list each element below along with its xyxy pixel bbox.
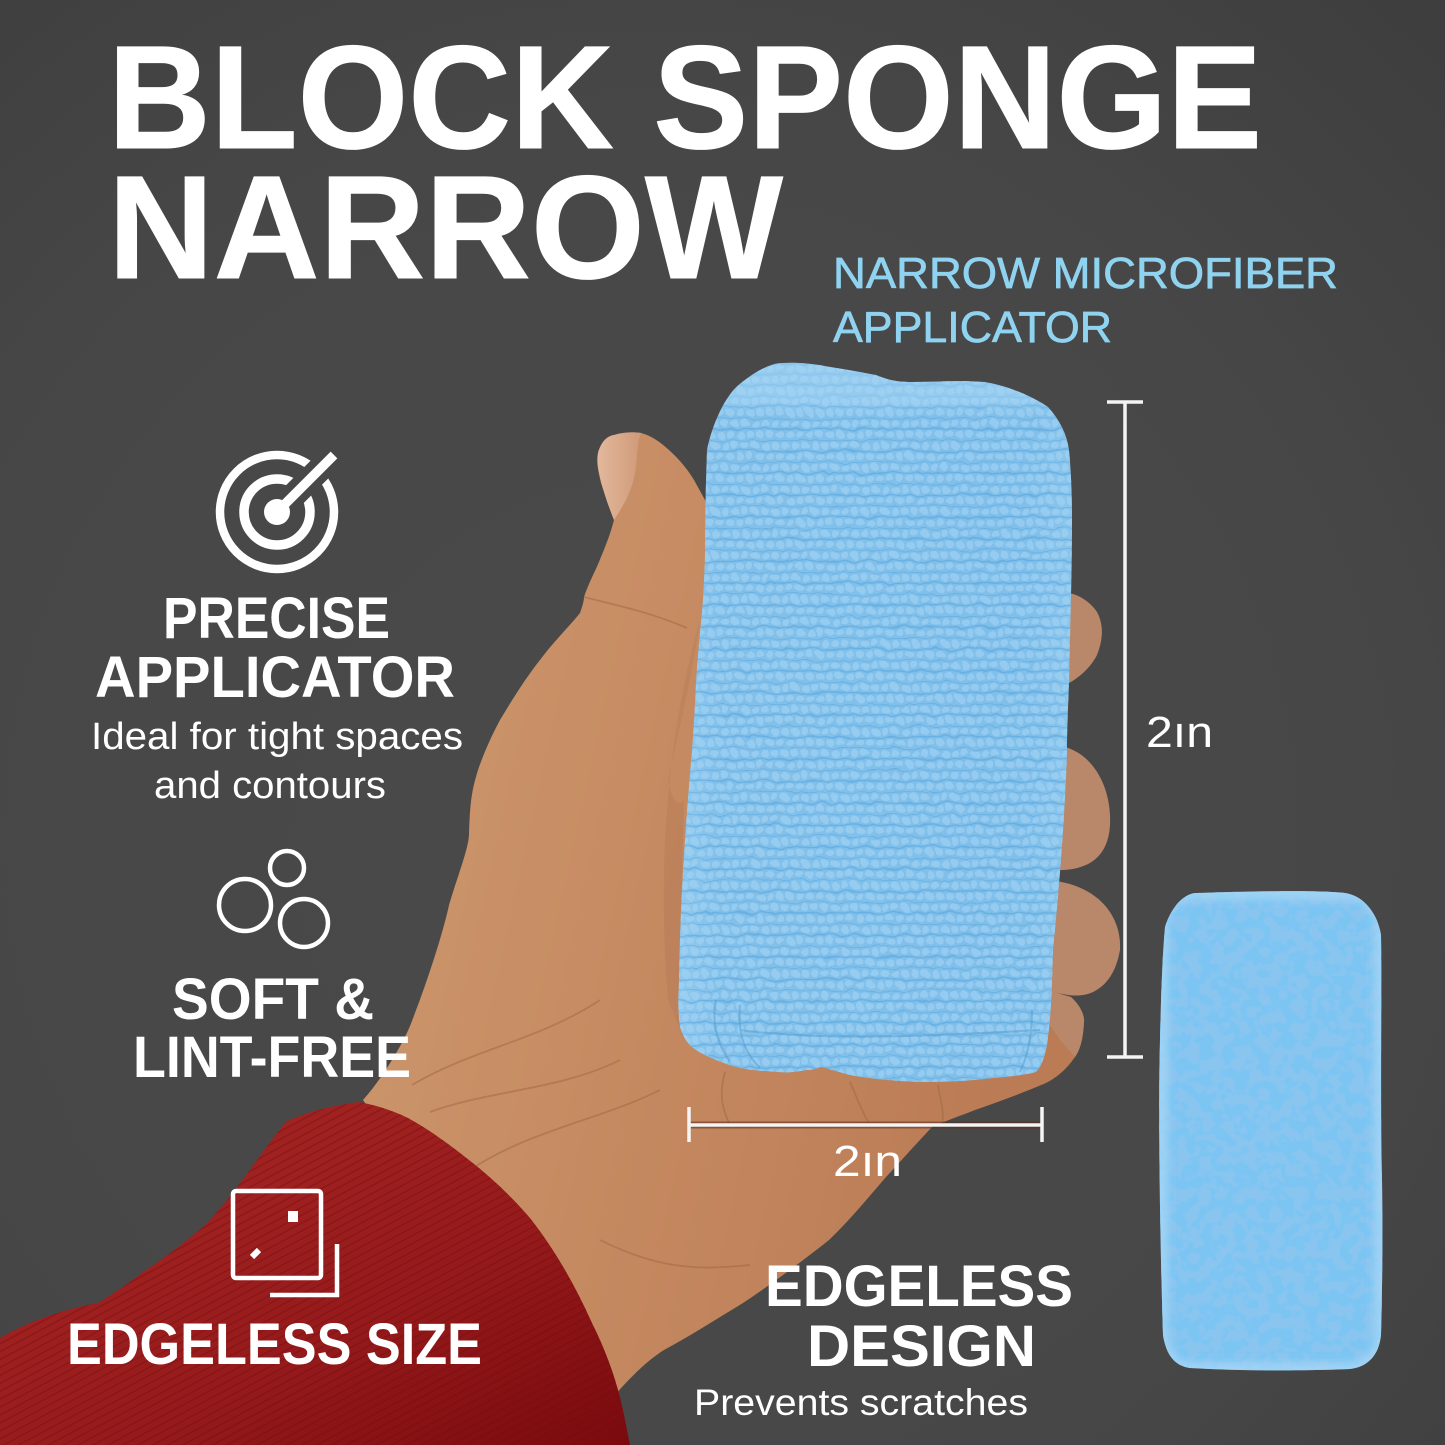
title: BLOCK SPONGE [108,16,1262,180]
large blue sponge [678,362,1072,1082]
sleeve [0,1102,630,1445]
sponge soft rim [722,362,1049,409]
fingers [1030,593,1120,1085]
heading: APPLICATOR [95,645,455,710]
feature: precise applicator [91,449,463,807]
title: NARROW [108,146,783,310]
dimension: horizontal 2 in [689,1107,1042,1186]
sponge layered bottom edge [714,1000,1040,1072]
dimension: horizontal 2 in: 2ın [833,1137,902,1186]
heading: EDGELESS SIZE [67,1312,482,1377]
feature: edgeless design [694,1254,1073,1423]
small sponge pale rim [1161,893,1381,1369]
palm shadow beside sponge [664,620,700,1040]
description: and contours [154,765,386,807]
heading [95,586,455,710]
description: Ideal for tight spaces [91,716,463,758]
heading: DESIGN [807,1314,1036,1379]
skin creases [412,597,943,1267]
hand holding the sponge [363,432,1120,1398]
dimension: vertical 2 in [1107,402,1213,1057]
description: Prevents scratches [694,1382,1028,1423]
heading: LINT-FREE [133,1025,411,1090]
heading: SOFT & [172,967,374,1032]
title [108,16,1262,310]
feature: soft and lint-free [133,851,411,1090]
subtitle [833,249,1338,352]
icon: target [220,449,340,569]
icon: three circles [219,851,328,947]
thumb nail [598,432,641,520]
heading [133,967,411,1090]
heading [765,1254,1073,1379]
subtitle: APPLICATOR [833,303,1112,352]
description [91,716,463,807]
dimension: vertical 2 in: 2ın [1146,708,1213,757]
heading: EDGELESS [765,1254,1073,1319]
feature: edgeless size [67,1191,482,1377]
heading: PRECISE [163,586,390,651]
icon: layered square [233,1191,337,1295]
small blue sponge [1155,885,1387,1375]
palm and thumb [363,432,1075,1398]
subtitle: NARROW MICROFIBER [833,249,1338,298]
